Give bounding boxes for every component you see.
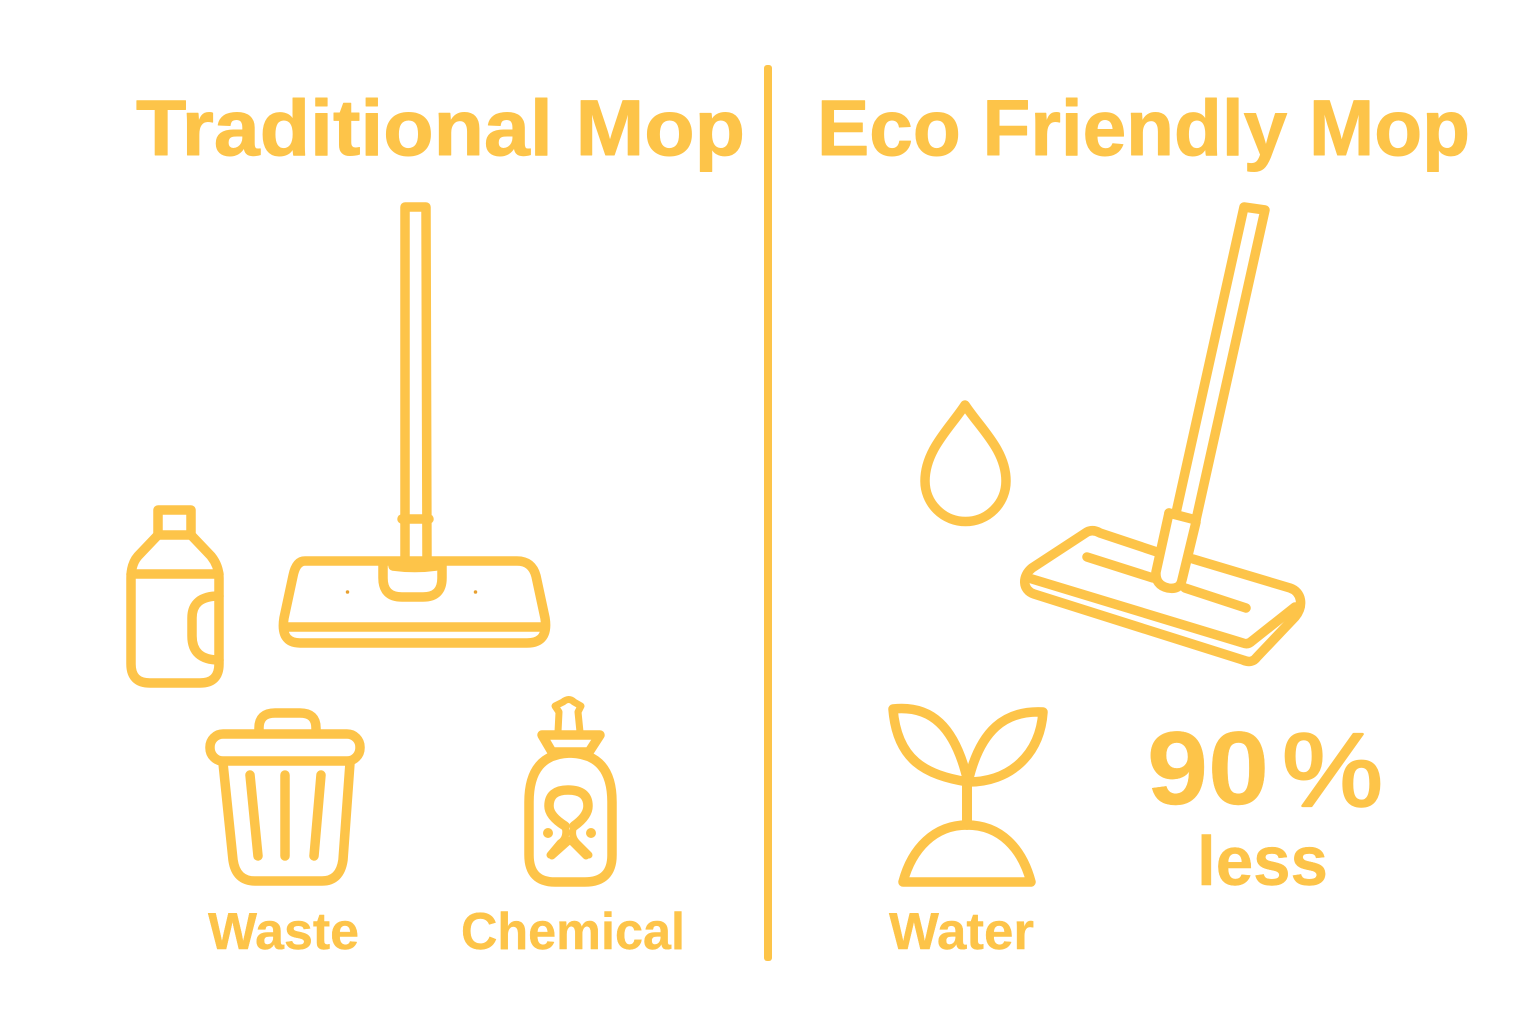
icon: trash can	[210, 713, 360, 881]
stat: 90%: 90	[1147, 711, 1269, 827]
heading: Eco Friendly Mop: Eco Friendly Mop	[817, 83, 1470, 172]
label: Waste: Waste	[208, 903, 359, 961]
stat: 90%	[1147, 711, 1383, 829]
icon: eco mop	[1025, 207, 1301, 661]
label: Chemical: Chemical	[461, 903, 685, 961]
stat: 90%: %	[1282, 713, 1383, 829]
panel: traditional mop	[131, 83, 745, 961]
panel: eco friendly mop	[817, 83, 1470, 961]
icon: water drop	[925, 405, 1006, 522]
icon: cleaning bottle	[131, 510, 219, 683]
icon: chemical bottle	[529, 700, 612, 882]
heading: Traditional Mop: Traditional Mop	[136, 83, 745, 172]
icon: sprout	[893, 709, 1043, 882]
stat label: less: less	[1197, 822, 1328, 900]
label: Water: Water	[889, 903, 1034, 961]
icon: traditional mop	[283, 207, 546, 643]
